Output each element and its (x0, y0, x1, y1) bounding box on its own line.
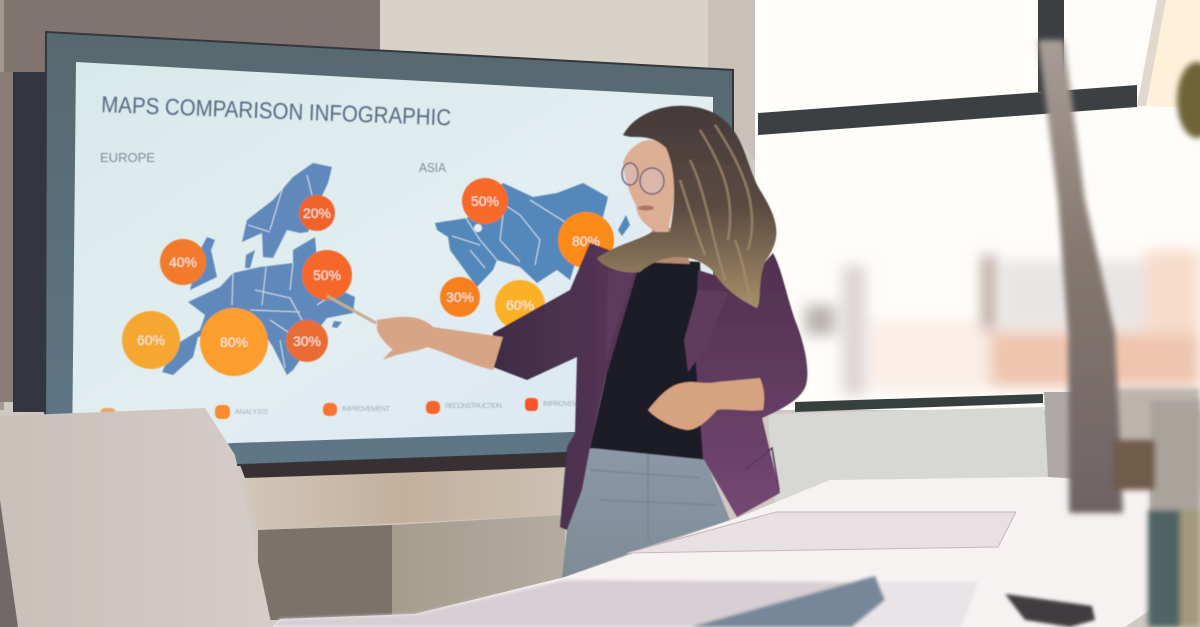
bubble: Europe 80% (200, 308, 268, 376)
black top (590, 258, 708, 460)
bubble: Asia 60% (495, 280, 545, 330)
bubble: Asia 50%: 50% (471, 193, 499, 209)
bubble: Asia 80%: 80% (572, 233, 600, 249)
legend item: Improvement: IMPROVEMENT (342, 406, 391, 413)
wall panels below window (768, 388, 1200, 505)
legend item: Construction (100, 408, 176, 420)
label: Europe: EUROPE (100, 150, 155, 165)
jacket right panel and sleeve (695, 253, 807, 517)
right arm and hand (648, 378, 764, 430)
table front surface (272, 576, 1095, 627)
legend item: Reconstruction (426, 401, 502, 414)
bubble: Europe 50%: 50% (313, 267, 341, 283)
bubble: Europe 50% (302, 250, 352, 300)
data bubbles: Europe (122, 195, 352, 376)
lips (638, 206, 654, 210)
pointing arm and hand (377, 317, 503, 370)
bubble: Europe 20%: 20% (303, 205, 331, 221)
jacket pocket (745, 448, 779, 490)
legend item: Analysis: ANALYSIS (235, 409, 268, 416)
jacket left lapel (606, 266, 636, 362)
jacket left panel and sleeve (493, 243, 640, 530)
monitor stand (1038, 40, 1123, 513)
bubble: Europe 30% (286, 320, 328, 362)
screen content (100, 91, 630, 420)
phone on table (1005, 594, 1095, 627)
book on table (690, 576, 885, 627)
bubble: Europe 60% (122, 311, 180, 369)
presenter (327, 106, 807, 578)
bubble: Europe 20% (299, 195, 335, 231)
blurred buildings outside (805, 250, 1200, 395)
document on table (627, 512, 1016, 553)
display panel (45, 32, 733, 478)
bubble: Europe 80%: 80% (220, 334, 248, 350)
data bubbles: Asia (440, 178, 614, 330)
desk lamp (1137, 0, 1200, 138)
legend item: Construction: CONSTRUCTION (120, 412, 176, 419)
jacket right lapel (684, 290, 728, 372)
bubble: Europe 60%: 60% (137, 332, 165, 348)
neck (640, 228, 690, 264)
bubble: Europe 40%: 40% (169, 254, 197, 270)
window with bright outdoor view (755, 0, 1200, 412)
legend item: Analysis (215, 405, 268, 419)
legend item: Improvement 2 (525, 398, 592, 411)
bubble: Europe 30%: 30% (293, 333, 321, 349)
jeans (562, 448, 730, 578)
bubble: Asia 80% (558, 212, 614, 268)
legend item: Reconstruction: RECONSTRUCTION (445, 403, 502, 410)
map: Asia (435, 183, 630, 287)
bubble: Asia 30%: 30% (446, 289, 474, 305)
foreground plant blur (1113, 400, 1200, 627)
screen surface (72, 62, 713, 456)
bubble: Asia 50% (462, 178, 508, 224)
legend item: Improvement (323, 403, 391, 416)
office chair (0, 408, 272, 627)
lower wall below display (245, 467, 565, 620)
label: Asia: ASIA (419, 160, 446, 175)
legend (100, 398, 592, 420)
pointer stick (327, 296, 376, 323)
display bezel (45, 32, 733, 470)
face (623, 140, 676, 232)
bubble: Europe 40% (160, 239, 206, 285)
legend item: Improvement 2: IMPROVEMENT (543, 401, 592, 408)
glasses (622, 163, 664, 194)
hair (597, 106, 776, 308)
table (272, 477, 1150, 627)
map: Europe (162, 163, 355, 375)
display lower shadow (240, 453, 570, 478)
title: MAPS COMPARISON INFOGRAPHIC (101, 91, 452, 130)
bubble: Asia 60%: 60% (506, 297, 534, 313)
bubble: Asia 30% (440, 277, 480, 317)
